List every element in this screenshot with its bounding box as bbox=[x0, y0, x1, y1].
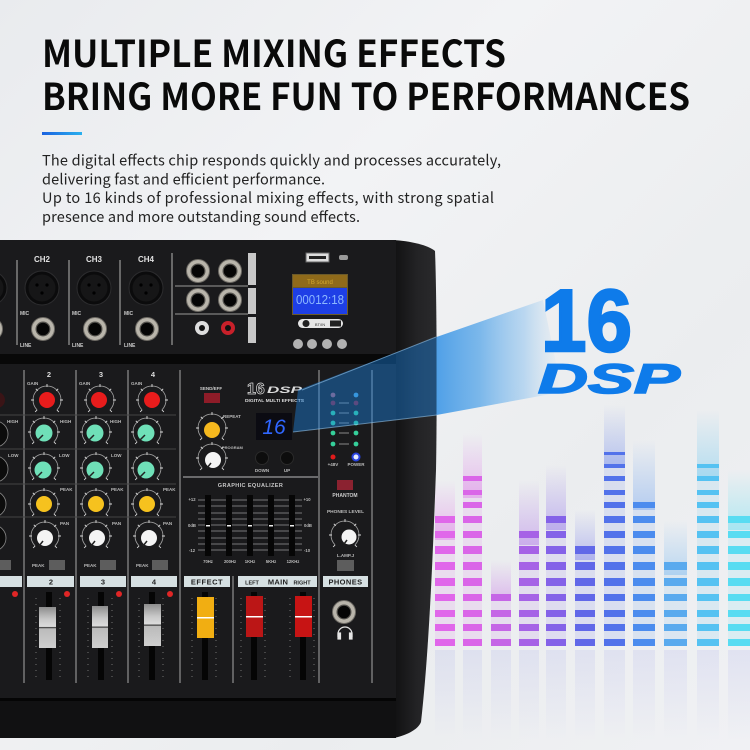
knob labels: LOW bbox=[8, 453, 19, 458]
graphic equalizer: 200Hz bbox=[224, 559, 236, 564]
effect number display: 16 bbox=[262, 416, 286, 439]
peak switches: PEAK bbox=[84, 563, 97, 568]
peak LEDs bbox=[12, 591, 173, 597]
icon: headphones bbox=[338, 627, 352, 639]
up down buttons: UP bbox=[284, 468, 290, 473]
phantom button: PHANTOM bbox=[332, 493, 358, 499]
peak switches bbox=[0, 560, 168, 570]
graphic equalizer: 1KHz bbox=[245, 559, 255, 564]
RCA jacks bbox=[195, 321, 235, 335]
left cropped knobs bbox=[0, 421, 8, 551]
knob labels: GAIN bbox=[79, 381, 90, 386]
channel label strips: EFFECT bbox=[191, 578, 223, 586]
channel label strips: 3 bbox=[101, 578, 105, 586]
main faders bbox=[246, 596, 312, 637]
title: BRING MORE FUN TO PERFORMANCES bbox=[42, 67, 690, 121]
level meter LEDs bbox=[331, 393, 358, 446]
LCD display: TB sound bbox=[307, 280, 333, 286]
knob labels: LOW bbox=[59, 453, 70, 458]
power indicators: +48V bbox=[328, 462, 338, 467]
channel label strips: 4 bbox=[152, 578, 157, 586]
bluetooth USB pill: BT/IN bbox=[315, 322, 325, 327]
input labels: CH2 bbox=[34, 255, 51, 264]
bar reflections bbox=[435, 650, 750, 740]
front panel dividers bbox=[0, 370, 372, 683]
graphic equalizer: 0dB bbox=[188, 523, 196, 528]
EQ low knobs bbox=[28, 452, 163, 480]
phones jack bbox=[332, 600, 356, 624]
channel faders bbox=[0, 604, 161, 648]
XLR inputs bbox=[0, 271, 163, 305]
knob labels: HIGH bbox=[60, 419, 71, 424]
knob labels: LOW bbox=[111, 453, 122, 458]
phones level knob: PHONES LEVEL bbox=[327, 509, 364, 515]
equalizer light bars bbox=[435, 415, 750, 688]
up down buttons: DOWN bbox=[255, 468, 269, 473]
channel label strips: LEFT bbox=[245, 580, 260, 586]
knob labels: PEAK bbox=[111, 487, 124, 492]
channel numbers bbox=[47, 370, 156, 379]
USB port bbox=[306, 253, 348, 262]
graphic equalizer: -12 bbox=[189, 548, 196, 553]
pan knobs bbox=[29, 520, 165, 548]
DSP badge bbox=[245, 381, 304, 403]
graphic equalizer bbox=[188, 483, 312, 564]
description text: presence and more outstanding sound effects. bbox=[42, 206, 360, 227]
up down buttons bbox=[255, 452, 294, 473]
rear input panel bbox=[0, 253, 348, 349]
mic line labels bbox=[20, 311, 136, 349]
bar tints bbox=[435, 452, 750, 646]
knob labels: PAN bbox=[163, 521, 172, 526]
bluetooth USB pill bbox=[298, 319, 343, 328]
program knob bbox=[196, 442, 244, 470]
graphic equalizer: -10 bbox=[304, 548, 311, 553]
gain knobs bbox=[0, 384, 168, 412]
mic line labels: LINE bbox=[72, 343, 84, 349]
mic line labels: MIC bbox=[20, 311, 30, 317]
knob labels: PEAK bbox=[60, 487, 73, 492]
mixer body bbox=[0, 240, 396, 738]
repeat knob bbox=[196, 412, 241, 440]
DSP badge: 16 bbox=[247, 381, 265, 398]
graphic equalizer: +12 bbox=[188, 497, 196, 502]
bar segments bbox=[435, 452, 750, 646]
mic line labels: LINE bbox=[20, 343, 32, 349]
channel label strips: MAIN bbox=[268, 578, 288, 586]
graphic equalizer: 70Hz bbox=[203, 559, 213, 564]
16 DSP logo bbox=[538, 271, 682, 402]
title: MULTIPLE MIXING EFFECTS bbox=[42, 24, 506, 78]
input labels: CH3 bbox=[86, 255, 103, 264]
knob labels: PAN bbox=[60, 521, 69, 526]
channel label strips bbox=[0, 576, 368, 587]
knob labels: GAIN bbox=[131, 381, 142, 386]
knob labels: GAIN bbox=[27, 381, 38, 386]
line jacks bbox=[0, 260, 242, 340]
description text: delivering fast and efficient performance. bbox=[42, 168, 325, 190]
channel dividers bbox=[17, 253, 248, 345]
mic line labels: MIC bbox=[124, 311, 134, 317]
knob labels: PAN bbox=[112, 521, 121, 526]
send effect button: SEND/EFF bbox=[200, 386, 222, 391]
phones switch: L.AMP.J bbox=[337, 553, 355, 558]
repeat knob: REPEAT bbox=[223, 414, 241, 419]
power indicators: POWER bbox=[347, 462, 365, 467]
graphic equalizer: 12KHz bbox=[287, 559, 299, 564]
accent line bbox=[42, 132, 82, 135]
16 DSP logo: DSP bbox=[538, 355, 682, 402]
channel label strips: RIGHT bbox=[293, 580, 311, 586]
knob labels: PEAK bbox=[163, 487, 176, 492]
channel numbers: 4 bbox=[151, 370, 156, 379]
channel numbers: 2 bbox=[47, 370, 51, 379]
peak knobs bbox=[28, 488, 163, 516]
channel label strips: 2 bbox=[49, 578, 53, 586]
description text: Up to 16 kinds of professional mixing effects, with strong spatial bbox=[42, 187, 494, 208]
fader scales bbox=[36, 598, 314, 678]
graphic equalizer: 5KHz bbox=[266, 559, 276, 564]
LCD display: 00012:18 bbox=[296, 292, 344, 307]
knob labels bbox=[7, 381, 176, 526]
channel label strips: PHONES bbox=[328, 578, 363, 586]
side cheek bbox=[393, 240, 437, 738]
graphic equalizer: 0dB bbox=[304, 523, 312, 528]
program knob: PROGRAM bbox=[222, 445, 244, 450]
description text: The digital effects chip responds quickly and processes accurately, bbox=[42, 150, 501, 170]
input labels: CH4 bbox=[138, 255, 155, 264]
knob labels: HIGH bbox=[110, 419, 121, 424]
channel numbers: 3 bbox=[99, 370, 103, 379]
DSP badge: DIGITAL MULTI EFFECTS bbox=[245, 398, 304, 403]
player buttons bbox=[293, 339, 347, 349]
send effect button bbox=[200, 386, 222, 403]
audio mixer bbox=[0, 240, 437, 738]
power indicators bbox=[328, 454, 365, 467]
EQ high knobs bbox=[28, 416, 163, 444]
phantom button bbox=[332, 480, 358, 499]
description text bbox=[42, 150, 501, 227]
effect fader bbox=[197, 597, 214, 638]
knob labels: HIGH bbox=[7, 419, 18, 424]
output labels bbox=[248, 253, 256, 343]
peak switches: PEAK bbox=[136, 563, 149, 568]
projection beam bbox=[293, 300, 562, 432]
input labels bbox=[34, 255, 155, 264]
peak switches: PEAK bbox=[32, 563, 45, 568]
DSP badge: DSP bbox=[267, 385, 304, 395]
mic line labels: LINE bbox=[124, 343, 136, 349]
effect number display bbox=[256, 413, 292, 440]
LCD display bbox=[292, 274, 348, 315]
graphic equalizer: +10 bbox=[303, 497, 311, 502]
fader tracks bbox=[46, 592, 306, 680]
16 DSP logo: 16 bbox=[541, 271, 632, 370]
phones level knob bbox=[327, 509, 364, 547]
mic line labels: MIC bbox=[72, 311, 82, 317]
graphic equalizer: GRAPHIC EQUALIZER bbox=[218, 483, 283, 489]
bar glows bbox=[435, 405, 750, 600]
title bbox=[42, 24, 690, 121]
phones switch bbox=[337, 553, 355, 571]
